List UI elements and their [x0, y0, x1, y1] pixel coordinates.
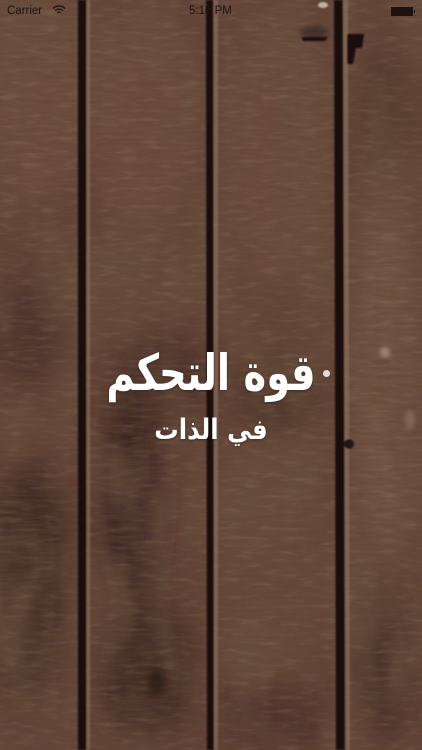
subtitle: في الذات — [154, 413, 268, 446]
plank seams — [78, 0, 346, 750]
icon: battery — [391, 7, 415, 16]
status bar: carrier: Carrier — [7, 5, 42, 17]
title: قوة التحكم — [106, 344, 316, 402]
status bar: time: 5:10 PM — [189, 5, 232, 17]
icon: wifi — [52, 5, 66, 13]
title dot — [323, 370, 330, 377]
